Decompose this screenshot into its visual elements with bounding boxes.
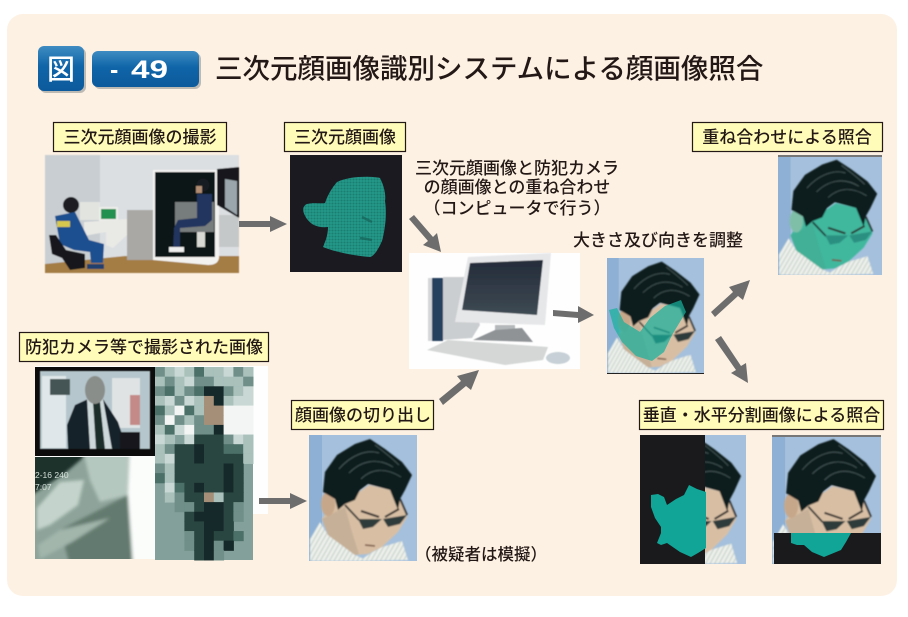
figure number badge — [92, 51, 201, 89]
image: computer — [409, 253, 580, 369]
label: security camera images — [20, 332, 268, 362]
figure badge: 図 — [47, 54, 75, 85]
arrow: cropped face to computer — [439, 370, 479, 405]
caption: overlay with security camera image: の顔画像との重ね合わせ — [424, 178, 610, 197]
figure number badge: - — [110, 56, 118, 84]
label: security camera images: 防犯カメラ等で撮影された画像 — [25, 338, 263, 357]
image: 3D wireframe face — [290, 155, 402, 272]
caption: adjust size and orientation: 大きさ及び向きを調整 — [573, 231, 743, 250]
caption: overlay with security camera image: （コンピュータで行う） — [424, 199, 610, 218]
arrow: computer to adjusted face — [553, 306, 594, 323]
caption: overlay with security camera image — [415, 159, 619, 218]
figure badge — [38, 46, 86, 93]
image: horizontal split comparison — [772, 435, 881, 564]
photo: scanning booth — [45, 155, 239, 273]
image: adjusted face overlay — [607, 258, 704, 374]
label: crop face image: 顔画像の切り出し — [295, 406, 431, 425]
label: overlay comparison — [692, 122, 882, 152]
arrow: 3D image to computer — [409, 215, 441, 252]
label: photographing: 三次元顔画像の撮影 — [64, 128, 216, 147]
arrow: footage to cropped face — [259, 493, 307, 509]
arrow: to overlay comparison — [711, 280, 750, 317]
image: security camera footage: 7:07 — [35, 482, 52, 492]
label: vertical and horizontal split comparison — [640, 400, 884, 430]
image: cropped face — [309, 435, 417, 561]
label: 3D face image: 三次元顔画像 — [294, 128, 396, 147]
arrow: photo to 3D image — [239, 216, 287, 232]
title: 三次元顔画像識別システムによる顔画像照合 — [215, 53, 763, 84]
image: security camera footage: 2-16 240 — [35, 470, 69, 480]
arrow: to split comparison — [715, 336, 748, 383]
figure number badge: 49 — [131, 56, 168, 84]
label: 3D face image — [284, 122, 406, 152]
image: security camera footage — [30, 366, 268, 565]
label: overlay comparison: 重ね合わせによる照合 — [702, 128, 872, 147]
image: overlay comparison — [778, 155, 882, 275]
note: suspect is simulated: （被疑者は模擬） — [415, 545, 547, 564]
caption: overlay with security camera image: 三次元顔画像と防犯カメラ — [415, 159, 619, 178]
label: vertical and horizontal split comparison: 垂直・水平分割画像による照合 — [643, 406, 880, 425]
label: photographing — [54, 122, 226, 152]
image: vertical split comparison — [640, 435, 746, 564]
label: crop face image — [292, 400, 434, 430]
